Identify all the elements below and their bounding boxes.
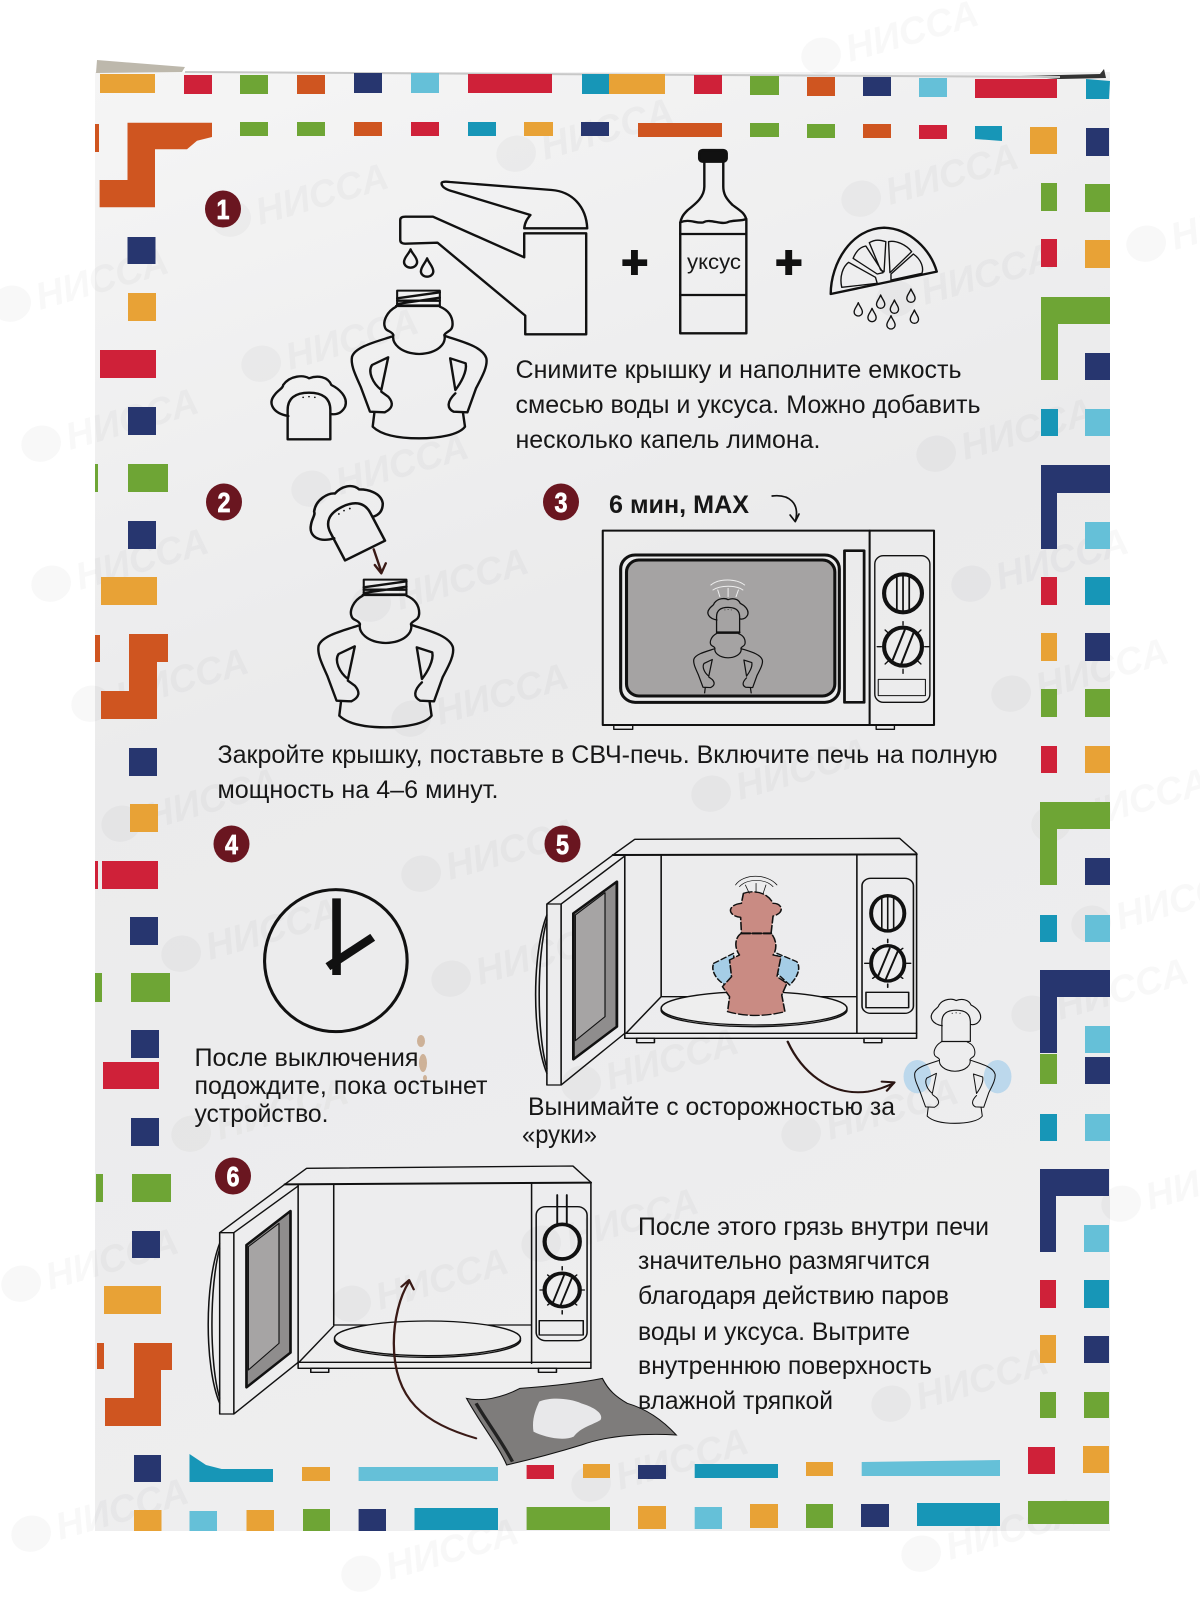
brand watermarks: НИССА <box>211 1071 353 1149</box>
step 1 badge: 1 <box>216 194 230 225</box>
step 6 instructions <box>638 1213 989 1415</box>
step 4 instructions: устройство. <box>194 1100 328 1128</box>
step 3 illustration: closed microwave <box>603 496 934 729</box>
brand watermarks: НИССА <box>141 761 283 839</box>
brand watermarks: НИССА <box>611 1421 753 1499</box>
step 3 instructions: Закройте крышку, поставьте в СВЧ-печь. Включите печь на полную <box>218 741 997 769</box>
step 6 badge <box>215 1158 251 1194</box>
step 5 arrow to cooled figure <box>788 1042 894 1092</box>
step 1 instructions: Снимите крышку и наполните емкость <box>516 356 962 384</box>
brand watermarks: НИССА <box>1031 631 1173 709</box>
step 5 instructions: Вынимайте с осторожностью за <box>528 1093 895 1121</box>
step 3 badge: 3 <box>554 487 568 518</box>
brand watermarks: НИССА <box>201 891 343 969</box>
brand watermarks: НИССА <box>431 656 573 734</box>
step 1 instructions: несколько капель лимона. <box>516 426 820 454</box>
brand watermarks: НИССА <box>71 521 213 599</box>
step 5 instructions <box>522 1093 895 1149</box>
brand watermarks: НИССА <box>381 1511 523 1589</box>
step 3 timer label: 6 мин, МАХ <box>609 491 749 519</box>
brand watermarks: НИССА <box>601 1021 743 1099</box>
step 6 instructions: значительно размягчится <box>638 1247 930 1275</box>
step 6 instructions: воды и уксуса. Вытрите <box>638 1318 910 1346</box>
brand watermarks: НИССА <box>941 1491 1083 1569</box>
step 6 instructions: внутреннюю поверхность <box>638 1352 932 1380</box>
step 6 badge: 6 <box>226 1161 240 1192</box>
step 1 illustration: plus signs, vinegar bottle and lemon <box>622 150 937 333</box>
step 3 badge <box>543 484 579 520</box>
step 6 instructions: благодаря действию паров <box>638 1282 949 1310</box>
step 1 instructions: смесью воды и уксуса. Можно добавить <box>516 391 980 419</box>
step 2 badge <box>206 484 242 520</box>
step 4 instructions: подождите, пока остынет <box>194 1072 488 1100</box>
brand watermarks: НИССА <box>991 521 1133 599</box>
brand watermarks: НИССА <box>371 1241 513 1319</box>
step 3 instructions: мощность на 4–6 минут. <box>218 776 499 804</box>
brand watermarks: НИССА <box>331 426 473 504</box>
brand watermarks: НИССА <box>731 731 873 809</box>
step 5 figure held by arms <box>904 999 1011 1123</box>
step 1 illustration: faucet <box>400 182 587 334</box>
border: top rows <box>100 73 1110 141</box>
step 4 badge <box>214 826 250 862</box>
brand watermarks: НИССА <box>51 1471 193 1549</box>
brand watermarks: НИССА <box>391 541 533 619</box>
step 2 illustration: lid going onto figure <box>299 475 453 727</box>
step 2 badge: 2 <box>218 487 230 518</box>
border: left column <box>95 123 212 1482</box>
brand watermarks: НИССА <box>41 1221 183 1299</box>
step 1 instructions <box>516 356 980 454</box>
brand watermarks: НИССА <box>111 641 253 719</box>
step 6 instructions: После этого грязь внутри печи <box>638 1213 989 1241</box>
brand watermarks: НИССА <box>281 301 423 379</box>
border: right columns <box>1028 127 1110 1474</box>
step 1 illustration: open chef figure with hat beside it <box>272 291 487 439</box>
border: bottom rows <box>134 1454 1109 1531</box>
brand watermarks: НИССА <box>536 91 678 169</box>
step 6 instructions: влажной тряпкой <box>638 1387 833 1415</box>
label on vinegar bottle: уксус <box>687 251 741 274</box>
step 4 instructions <box>194 1044 488 1128</box>
step 5 badge: 5 <box>556 829 569 860</box>
step 5 illustration: open microwave with hot figure <box>536 838 917 1085</box>
brand watermarks: НИССА <box>911 1341 1053 1419</box>
brand watermarks: НИССА <box>61 381 203 459</box>
step 5 badge <box>544 826 580 862</box>
brand watermarks: НИССА <box>1051 951 1193 1029</box>
step 6 illustration: wet cloth <box>467 1378 676 1465</box>
step 4 instructions: После выключения <box>194 1044 418 1072</box>
step 6 illustration: open empty microwave <box>208 1166 591 1414</box>
brand watermarks: НИССА <box>561 1181 703 1259</box>
brand watermarks: НИССА <box>441 811 583 889</box>
brand watermarks: НИССА <box>881 136 1023 214</box>
brand watermarks: НИССА <box>251 156 393 234</box>
step 1 badge <box>205 190 241 228</box>
brand watermarks: НИССА <box>471 916 613 994</box>
step 5 instructions: «руки» <box>522 1121 597 1149</box>
step 3 instructions <box>218 741 997 804</box>
step 6 arrow from cloth into oven <box>394 1280 476 1438</box>
brand watermarks: НИССА <box>31 241 173 319</box>
step 4 badge: 4 <box>225 829 238 860</box>
step 4 illustration: clock <box>265 890 407 1032</box>
brand watermarks: НИССА <box>916 236 1058 314</box>
rust stain <box>417 1035 427 1081</box>
brand watermarks: НИССА <box>956 391 1098 469</box>
brand watermarks: НИССА <box>821 1071 963 1149</box>
